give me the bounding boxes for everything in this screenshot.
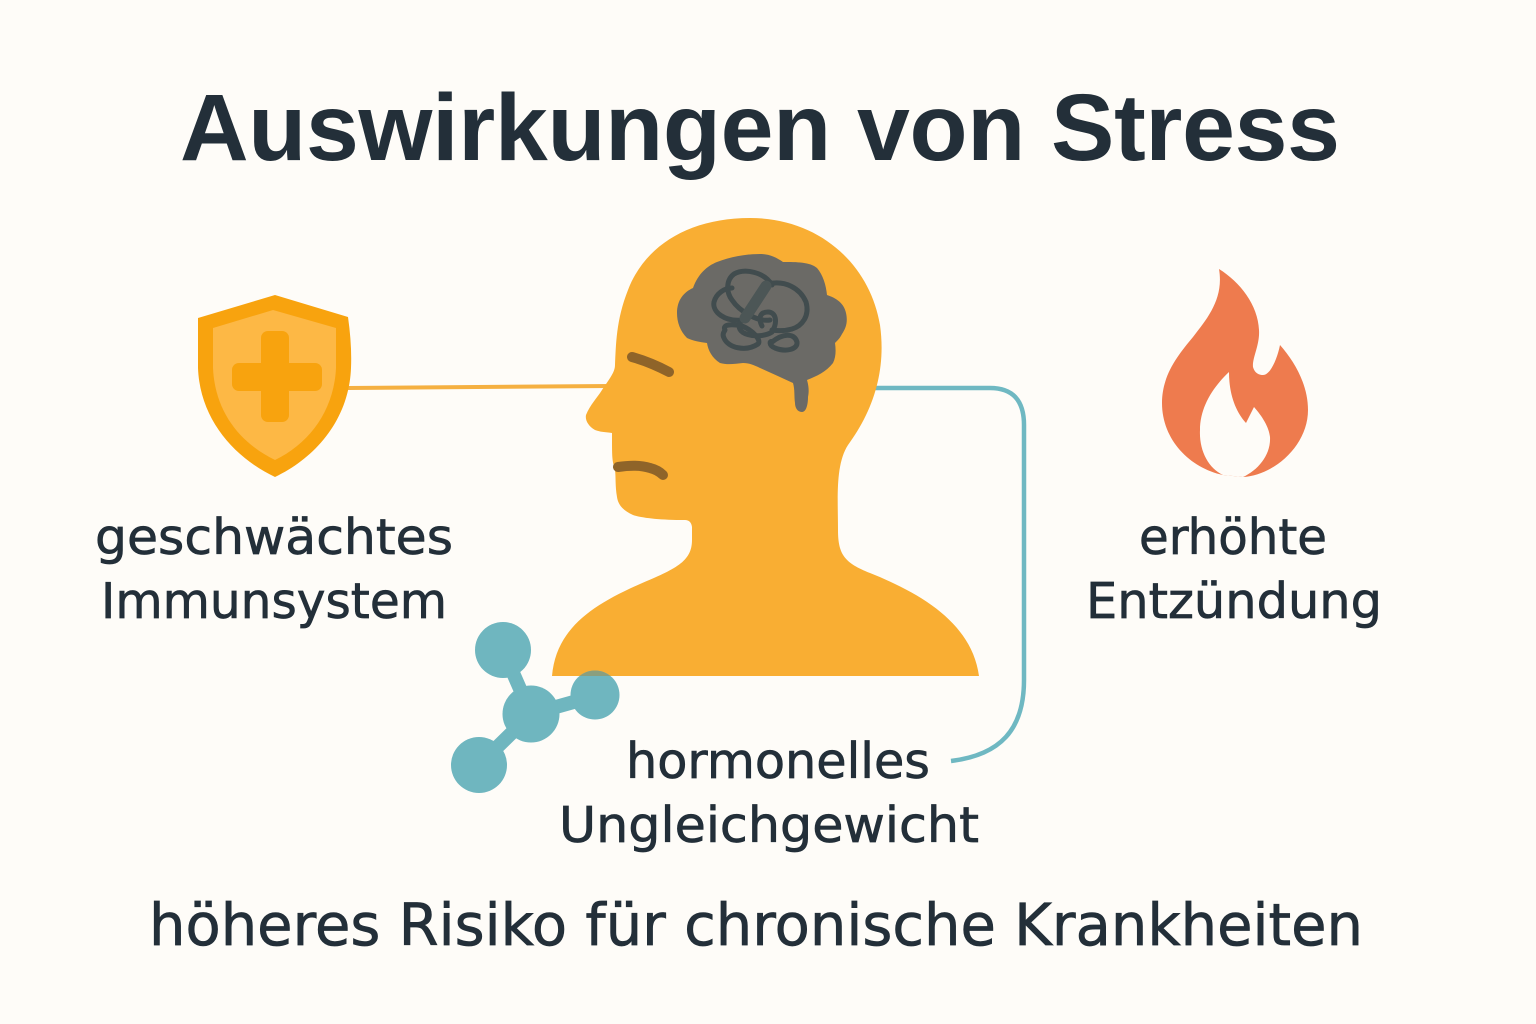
inner flame <box>1200 372 1270 477</box>
brain scribble knot <box>745 286 766 318</box>
eye <box>632 357 669 372</box>
label: immune system: Immunsystem <box>101 573 447 630</box>
label: inflammation: Entzündung <box>1086 573 1382 630</box>
mouth <box>618 466 663 475</box>
bottom statement: höheres Risiko für chronische Krankheiten <box>149 891 1363 959</box>
label: hormones: hormonelles <box>626 733 930 790</box>
label: inflammation <box>1086 509 1382 630</box>
title: Auswirkungen von Stress <box>180 75 1340 181</box>
label: inflammation: erhöhte <box>1139 509 1327 566</box>
icon: molecule <box>451 622 620 793</box>
label: immune system: geschwächtes <box>95 509 453 566</box>
head silhouette <box>552 218 979 676</box>
icon: flame <box>1162 269 1308 477</box>
icon: shield <box>198 295 351 477</box>
connector: shield to head <box>348 386 610 388</box>
connector: head to hormones <box>870 388 1024 761</box>
label: hormones <box>559 733 979 854</box>
plus <box>232 331 322 422</box>
label: hormones: Ungleichgewicht <box>559 797 979 854</box>
brain <box>677 254 847 412</box>
brain scribble <box>714 271 807 350</box>
label: immune system <box>95 509 453 630</box>
